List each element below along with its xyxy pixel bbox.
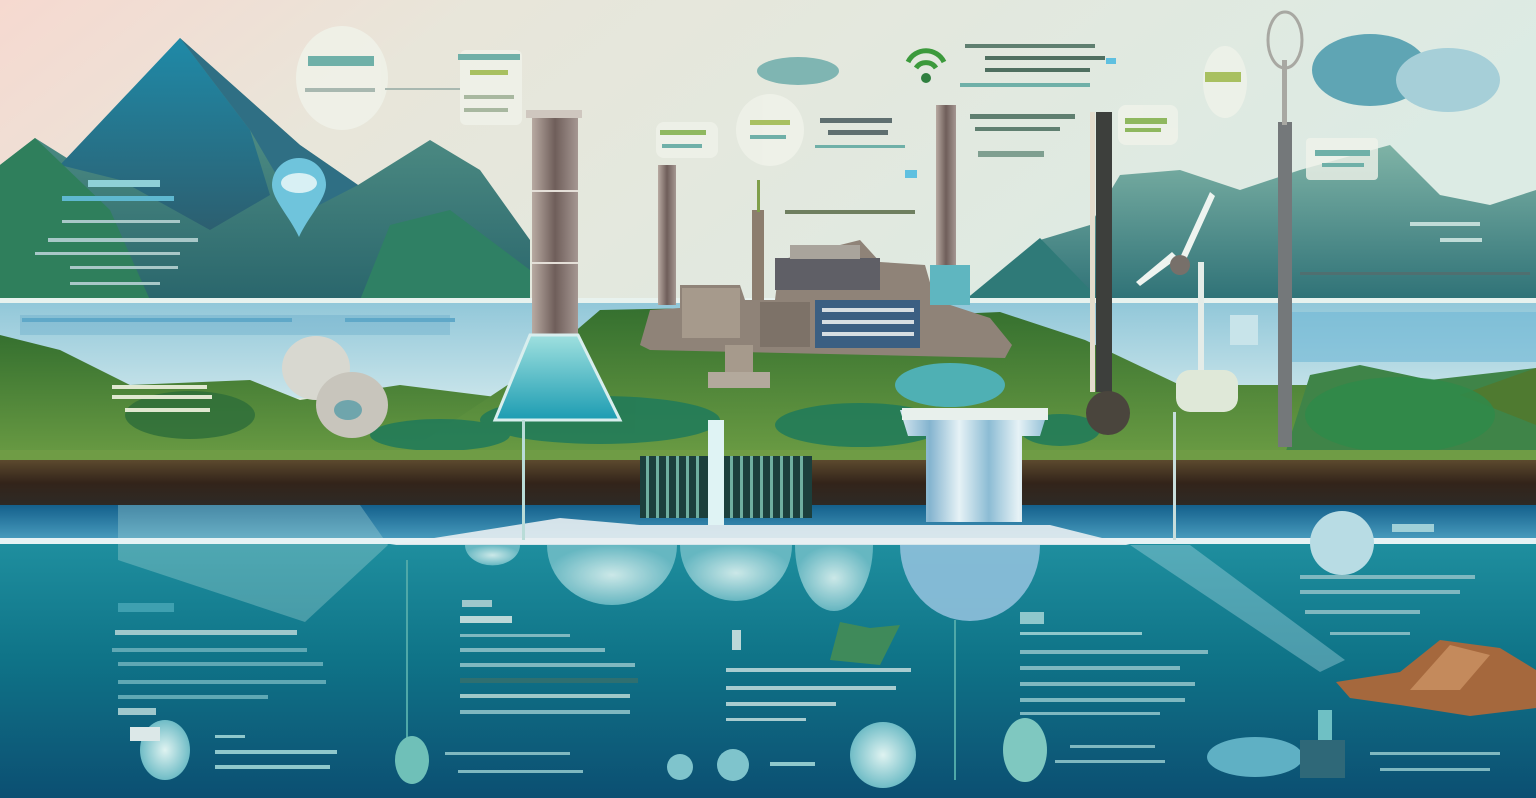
tall tower with flask bbox=[495, 110, 620, 540]
slender mast right bbox=[1268, 12, 1302, 447]
filter grate bbox=[640, 420, 812, 525]
cloud: upper right bbox=[1312, 34, 1500, 112]
cloud: centre small bbox=[757, 57, 839, 85]
wind turbine bbox=[1136, 192, 1238, 540]
underwater area bbox=[0, 505, 1536, 798]
callout bubbles top bbox=[296, 26, 1378, 180]
sky background bbox=[0, 0, 1536, 300]
rock outcrop right bbox=[1336, 640, 1536, 716]
underwater panel 3 bbox=[667, 620, 956, 788]
right bank bbox=[1280, 365, 1536, 470]
soil strip bbox=[0, 460, 1536, 506]
underwater panel 2 bbox=[395, 560, 638, 784]
map pin bbox=[272, 158, 326, 237]
central hill bbox=[380, 308, 1320, 470]
underwater panel 4 bbox=[1003, 612, 1208, 782]
white boulder devices left bbox=[282, 336, 388, 438]
top labels: pseudo-text rows bbox=[305, 44, 1370, 214]
glass tank left bbox=[118, 505, 388, 622]
underwater panel 5 bbox=[1300, 511, 1475, 635]
mountains left bbox=[0, 38, 530, 300]
thin dark chimney with fan bbox=[1086, 112, 1130, 435]
lake band bbox=[0, 298, 1536, 398]
lake label rows bbox=[22, 315, 1258, 345]
left bank label bbox=[112, 385, 212, 412]
hanging bubbles bbox=[465, 545, 1040, 621]
left bank bbox=[0, 335, 520, 470]
factory bbox=[640, 105, 1012, 388]
fish device bottom right bbox=[1207, 710, 1500, 778]
left mountain text block bbox=[35, 180, 198, 285]
mountains right bbox=[965, 145, 1536, 300]
wifi icon bbox=[908, 51, 944, 83]
glass beam right bbox=[1130, 545, 1345, 672]
right mountain text block bbox=[1300, 222, 1530, 275]
basin and waterfall bbox=[895, 363, 1048, 522]
underwater panel 1 bbox=[112, 603, 337, 780]
waterline bbox=[0, 538, 1536, 544]
foliage bbox=[125, 377, 1495, 453]
